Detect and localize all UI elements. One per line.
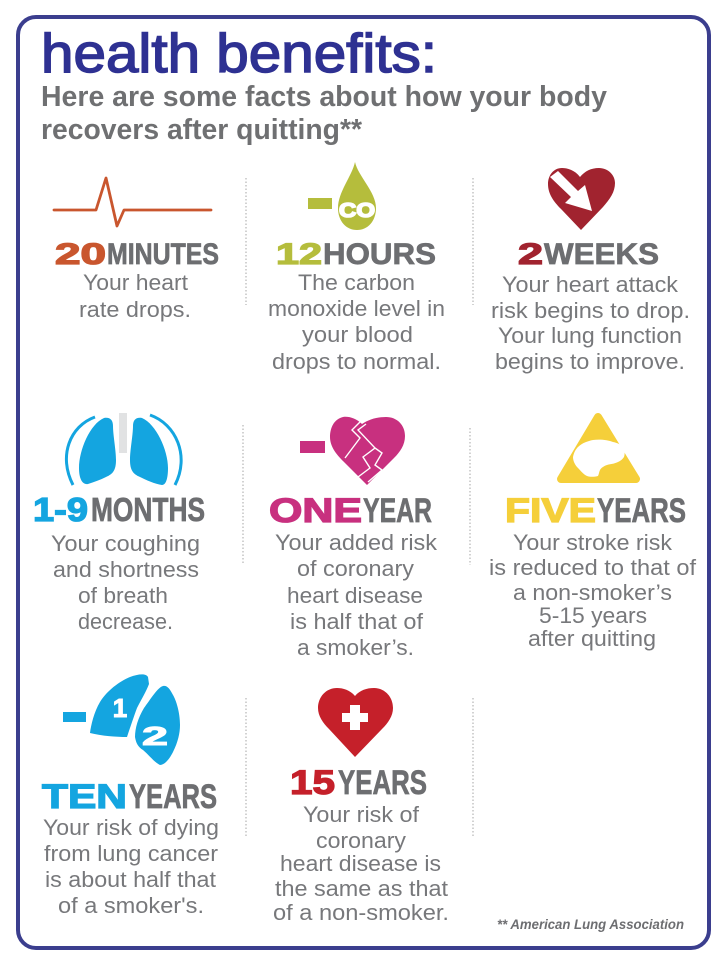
text: 12 hours: your blood bbox=[302, 322, 413, 347]
heading: 12 hours: 12 bbox=[276, 238, 322, 271]
text: 20 minutes: rate drops. bbox=[79, 297, 191, 322]
icon: carbon monoxide drop: CO bbox=[339, 200, 375, 222]
heading: 15 years bbox=[290, 764, 427, 802]
text: 15 years bbox=[273, 802, 449, 925]
text: 15 years: coronary bbox=[316, 828, 407, 853]
heading: 2 weeks: WEEKS bbox=[544, 238, 659, 271]
text: one year: Your added risk bbox=[275, 530, 438, 555]
icon: triangle with brain bbox=[561, 417, 636, 479]
text: ten years: of a smoker's. bbox=[58, 893, 204, 918]
heading: 1-9 months: MONTHS bbox=[91, 491, 205, 528]
panel: 15 years bbox=[273, 688, 449, 925]
text: 20 minutes: Your heart bbox=[83, 270, 189, 295]
subtitle: recovers after quitting** bbox=[41, 114, 363, 146]
text: 15 years: heart disease is bbox=[280, 851, 441, 876]
text: 1-9 months: and shortness bbox=[53, 557, 199, 582]
text: ten years: from lung cancer bbox=[44, 841, 219, 866]
subtitle bbox=[41, 81, 607, 146]
heading: 2 weeks: 2 bbox=[518, 238, 543, 271]
text: 12 hours: drops to normal. bbox=[272, 349, 441, 374]
heading: 12 hours bbox=[276, 238, 436, 271]
title: health benefits: bbox=[41, 22, 437, 84]
heading: ten years bbox=[42, 778, 217, 816]
text: 1-9 months: Your coughing bbox=[51, 531, 200, 556]
text: ten years: is about half that bbox=[45, 867, 217, 892]
heading: one year: YEAR bbox=[363, 492, 432, 530]
icon: heart with cross bbox=[318, 688, 393, 757]
text: 12 hours: monoxide level in bbox=[268, 296, 445, 321]
subtitle: Here are some facts about how your body bbox=[41, 81, 607, 113]
text: 2 weeks bbox=[491, 272, 690, 374]
heading: 1-9 months: 1-9 bbox=[33, 491, 88, 528]
text: 12 hours bbox=[268, 270, 445, 374]
icon: heartbeat line bbox=[54, 178, 211, 226]
text: 2 weeks: Your lung function bbox=[498, 323, 682, 348]
text: five years: a non-smoker’s bbox=[513, 580, 672, 605]
panel: ten years bbox=[42, 674, 219, 918]
text: one year: of coronary bbox=[297, 556, 415, 581]
icon: lungs bbox=[66, 413, 181, 485]
source note: ** American Lung Association bbox=[497, 916, 684, 932]
panel: 12 hours bbox=[268, 162, 445, 374]
heading: five years bbox=[505, 492, 686, 530]
text: five years bbox=[489, 530, 697, 651]
heading: five years: FIVE bbox=[505, 492, 596, 530]
heading: ten years: TEN bbox=[42, 778, 127, 816]
text: five years: Your stroke risk bbox=[513, 530, 673, 555]
panel: 20 minutes bbox=[54, 178, 219, 322]
text: 1-9 months: decrease. bbox=[78, 609, 173, 634]
text: ten years: Your risk of dying bbox=[43, 815, 219, 840]
text: five years: 5-15 years bbox=[539, 603, 647, 628]
panel: 1-9 months bbox=[33, 413, 205, 634]
text: one year: is half that of bbox=[290, 609, 424, 634]
heading: 20 minutes: MINUTES bbox=[107, 238, 219, 271]
text: five years: after quitting bbox=[528, 626, 656, 651]
text: one year bbox=[275, 530, 438, 660]
text: 1-9 months bbox=[51, 531, 200, 634]
panel: five years bbox=[489, 417, 697, 651]
heading: 20 minutes: 20 bbox=[55, 238, 106, 271]
text: 15 years: the same as that bbox=[275, 876, 449, 901]
icon: carbon monoxide drop bbox=[308, 162, 376, 230]
text: 20 minutes bbox=[79, 270, 191, 322]
text: 2 weeks: begins to improve. bbox=[495, 349, 685, 374]
heading: 12 hours: HOURS bbox=[323, 238, 436, 271]
text: 2 weeks: risk begins to drop. bbox=[491, 298, 690, 323]
icon: broken heart bbox=[300, 417, 405, 485]
heading: one year: ONE bbox=[269, 492, 362, 530]
text: one year: heart disease bbox=[287, 583, 423, 608]
icon: half lungs bbox=[63, 674, 180, 765]
icon: half lungs: 2 bbox=[142, 721, 168, 751]
icon: half lungs: 1 bbox=[113, 693, 127, 723]
icon: heart with down arrow bbox=[548, 168, 615, 230]
text: 15 years: Your risk of bbox=[303, 802, 420, 827]
text: 12 hours: The carbon bbox=[298, 270, 415, 295]
heading: ten years: YEARS bbox=[129, 778, 217, 816]
heading: five years: YEARS bbox=[597, 492, 686, 530]
text: ten years bbox=[43, 815, 219, 918]
text: five years: is reduced to that of bbox=[489, 555, 697, 580]
panel: 2 weeks bbox=[491, 168, 690, 374]
heading: 15 years: 15 bbox=[290, 764, 335, 802]
heading: 1-9 months bbox=[33, 491, 205, 528]
text: one year: a smoker’s. bbox=[297, 635, 414, 660]
panel: one year bbox=[269, 417, 438, 660]
text: 15 years: of a non-smoker. bbox=[273, 900, 449, 925]
text: 2 weeks: Your heart attack bbox=[502, 272, 679, 297]
heading: 15 years: YEARS bbox=[338, 764, 427, 802]
text: 1-9 months: of breath bbox=[78, 583, 168, 608]
heading: 20 minutes bbox=[55, 238, 219, 271]
heading: one year bbox=[269, 492, 432, 530]
